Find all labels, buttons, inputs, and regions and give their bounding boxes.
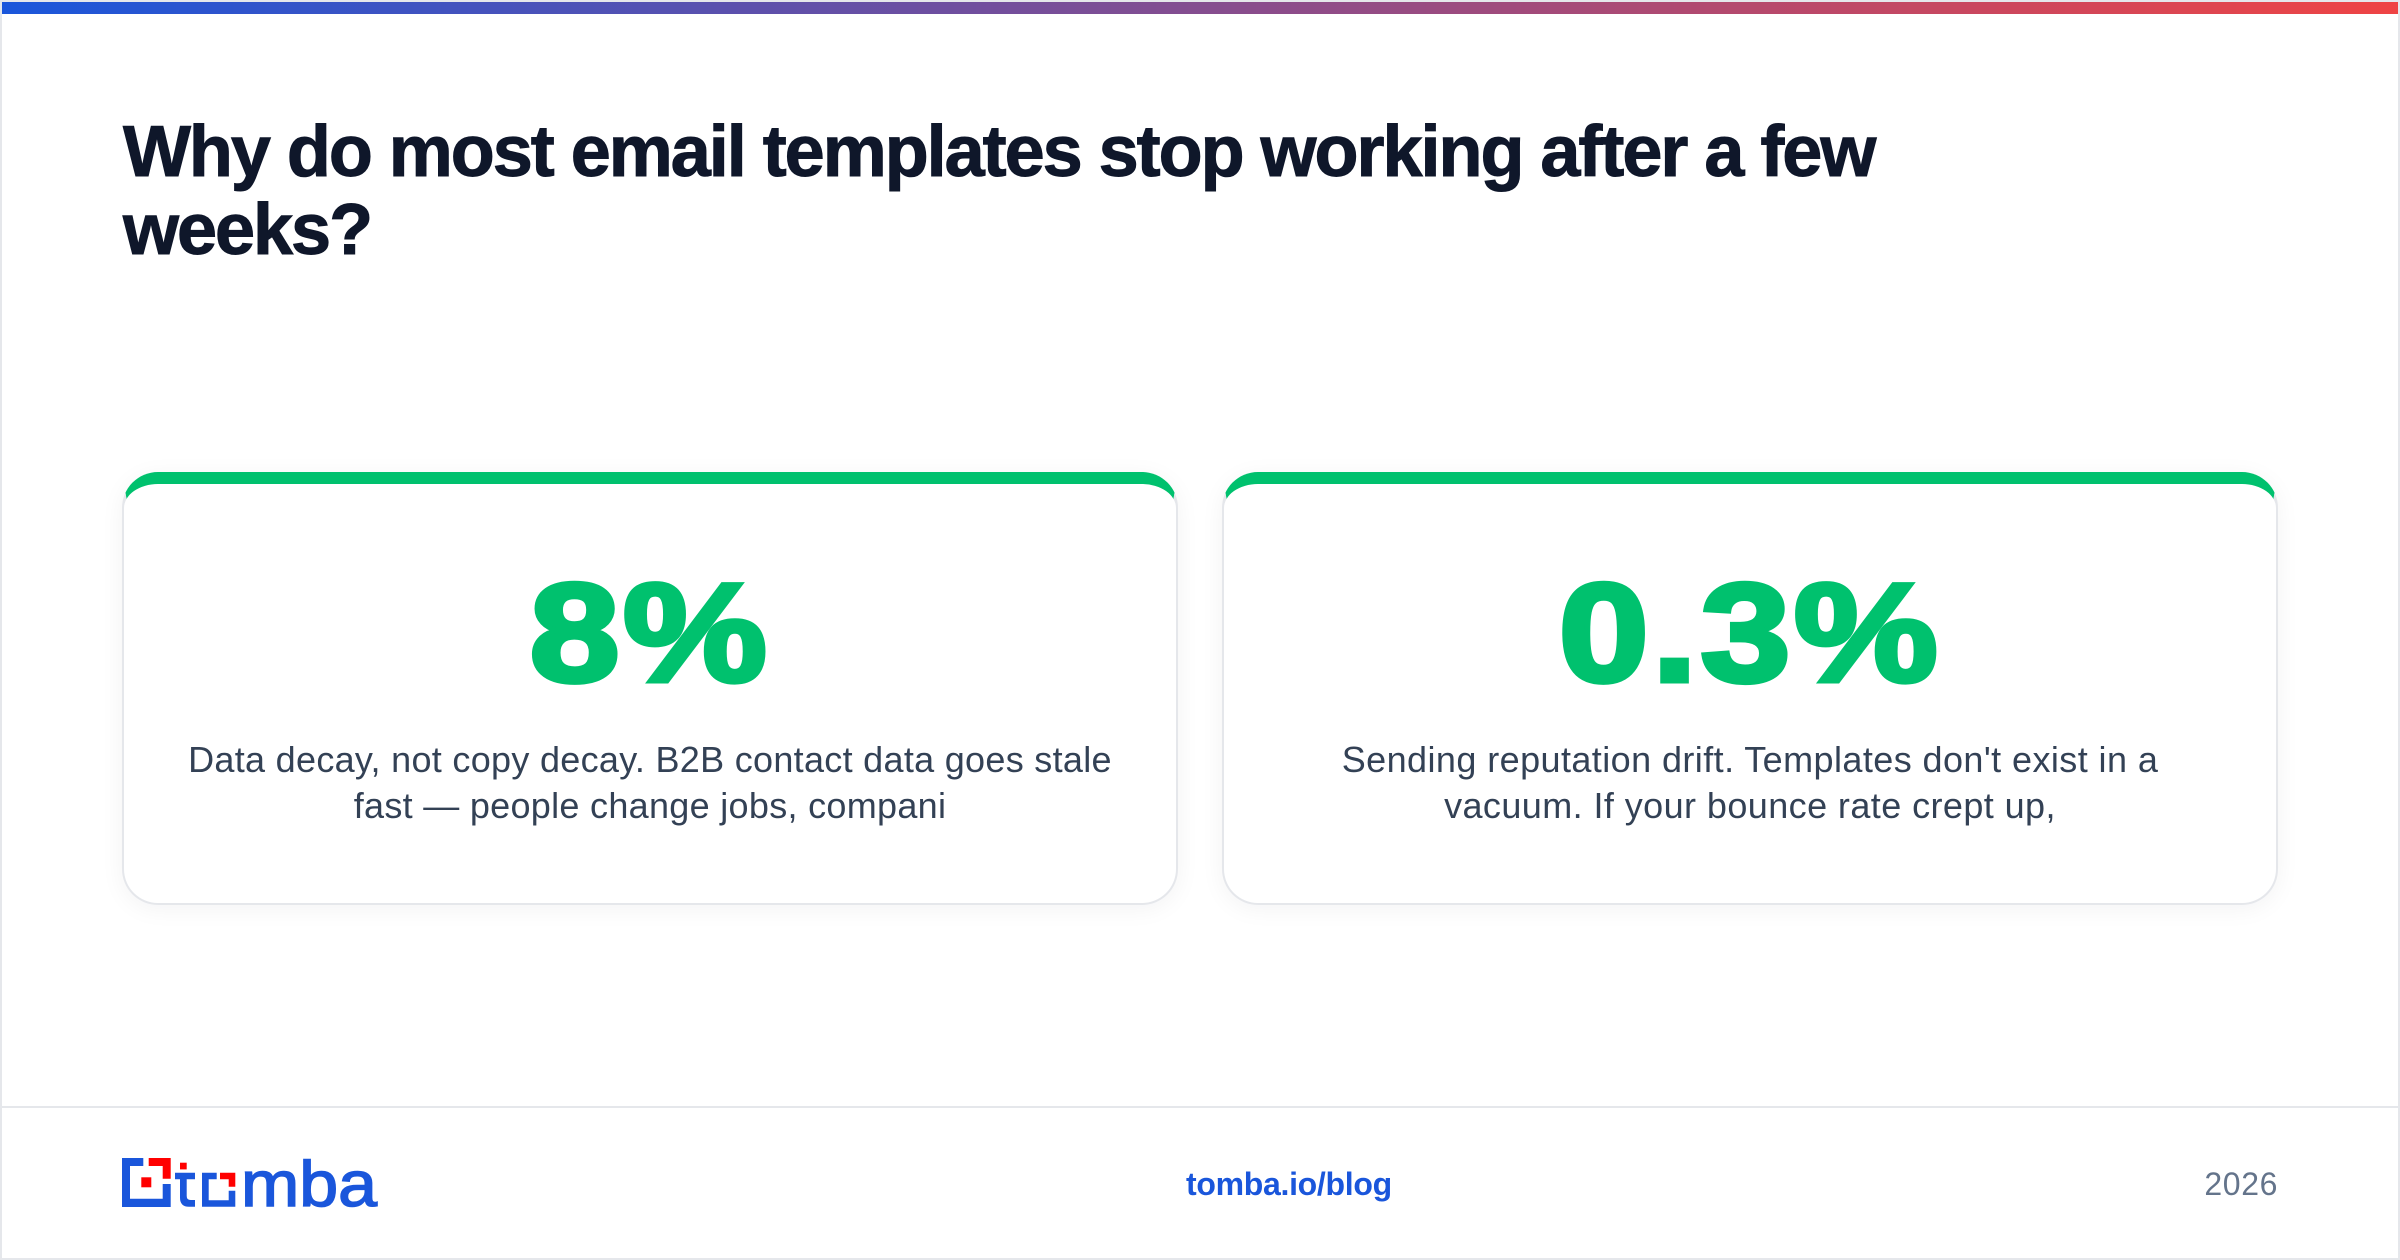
logo letter o bbox=[202, 1173, 235, 1207]
title: weeks? bbox=[123, 190, 371, 270]
title bbox=[122, 112, 1878, 270]
stat description: data decay: Data decay, not copy decay. B2B contact data goes stale bbox=[188, 739, 1112, 780]
stat number: 8%: 8% bbox=[530, 554, 770, 711]
stat description: data decay bbox=[188, 739, 1112, 826]
stat description: sending reputation bbox=[1342, 739, 2158, 826]
logo letter t bbox=[175, 1163, 195, 1207]
footer divider bbox=[2, 1106, 2398, 1108]
title: Why do most email templates stop working after a few bbox=[123, 112, 1874, 192]
panel: stat card 8% bbox=[122, 472, 1178, 905]
stat number: 0.3%: 0.3% bbox=[1559, 554, 1941, 711]
footer link: tomba.io/blog bbox=[1186, 1166, 1392, 1202]
stat description: data decay: fast — people change jobs, compani bbox=[354, 785, 946, 826]
icon: tomba square mark bbox=[122, 1158, 171, 1207]
footer year: 2026 bbox=[2204, 1166, 2278, 1202]
top gradient bar bbox=[2, 2, 2398, 14]
logo wordmark letters mba: mba bbox=[241, 1148, 377, 1220]
stat description: sending reputation: vacuum. If your bounce rate crept up, bbox=[1444, 785, 2056, 826]
stat description: sending reputation: Sending reputation drift. Templates don't exist in a bbox=[1342, 739, 2158, 780]
panel: stat card 0.3% bbox=[1222, 472, 2278, 905]
